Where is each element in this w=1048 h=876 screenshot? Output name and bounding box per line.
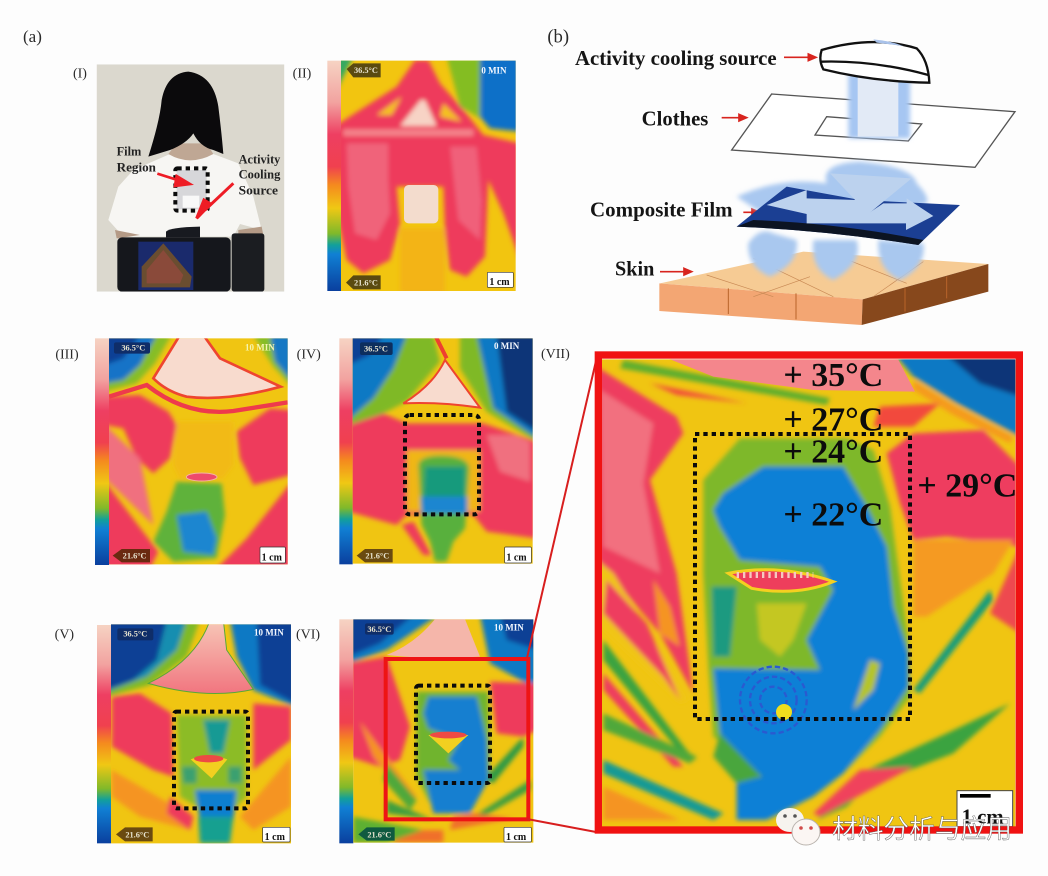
cooling source device: [820, 39, 929, 83]
temperature 22: + 22°C: [783, 496, 883, 533]
film region dotted box: [405, 415, 479, 514]
icon: camera handle: [166, 227, 200, 237]
panel II: thermal image 0 min, uncovered: 36.5°C: [354, 66, 378, 75]
cooling spiral pattern: [740, 667, 807, 733]
panel II: thermal image 0 min, uncovered: 21.6°C: [354, 279, 378, 288]
panel III: thermal image 10 min, cooling source on: [55, 335, 293, 568]
scale bar: [505, 547, 531, 563]
label: composite film: Composite Film: [590, 200, 733, 222]
heading: part a label: (a): [23, 27, 42, 46]
scale bar: [957, 791, 1013, 827]
watermark: WeChat logo: [776, 808, 820, 845]
panel number II: (II): [293, 66, 312, 81]
colour scale bar: [327, 61, 341, 291]
icon: camera screen: [138, 242, 193, 290]
watermark text: 材料分析与应用: [832, 814, 1012, 844]
panel number V: (V): [55, 628, 74, 643]
time label: 10 MIN: [245, 343, 275, 353]
film region dotted box: [695, 434, 910, 719]
left hot region: [597, 367, 693, 693]
arrow: clothes: [722, 114, 747, 121]
panel number I: (I): [73, 66, 87, 81]
panel VI: thermal image 10 min with zoom box: 21.6°C: [367, 830, 391, 839]
right hot region: [887, 430, 1020, 547]
icon: shirt: [108, 154, 262, 237]
time label: 0 MIN: [481, 65, 507, 75]
time label: 10 MIN: [494, 623, 524, 633]
icon: thermal camera: [117, 237, 231, 292]
temperature tags: [117, 628, 153, 640]
red frame: [598, 355, 1019, 830]
panel V: thermal image 10 min, film on: [55, 620, 295, 847]
zoom region red box: [386, 659, 528, 819]
panel II: thermal image 0 min, uncovered: 1 cm: [489, 277, 510, 288]
green film zone: [703, 438, 910, 777]
panel VI: thermal image 10 min with zoom box: 36.5°C: [367, 625, 391, 634]
film patch in thermal image: [404, 185, 438, 223]
panel III: thermal image 10 min, cooling source on: 36.5°C: [121, 344, 145, 353]
panel IV: thermal image 0 min, film on: 1 cm: [506, 552, 527, 563]
label: cooling source: Activity cooling source: [575, 48, 777, 70]
colour scale bar: [97, 625, 111, 843]
panel I: photo of subject with film and camera: [73, 64, 284, 292]
annotation: activity cooling source: Activity: [239, 152, 281, 166]
film hourglass: [191, 755, 227, 778]
diagonal green strips: [913, 590, 993, 693]
arrow: to film region: [157, 174, 190, 186]
zoom connector lines: [527, 361, 596, 832]
icon: arm skin: [115, 227, 263, 238]
heading: part b label: (b): [547, 27, 569, 48]
cold air cloud: [737, 162, 927, 223]
colour scale bar: [95, 338, 109, 565]
temperature tags: [347, 63, 381, 77]
film region dotted box: [175, 168, 208, 211]
panel IV: thermal image 0 min, film on: 36.5°C: [364, 344, 388, 353]
film hourglass: [428, 735, 468, 753]
panel III: thermal image 10 min, cooling source on: 21.6°C: [123, 552, 147, 561]
yellow hot point: [776, 704, 792, 720]
icon: hair: [148, 72, 223, 157]
time label: 0 MIN: [494, 341, 520, 351]
clothes sheet: [732, 73, 1015, 167]
top band: [620, 360, 830, 405]
arrow: to cooling source: [197, 183, 233, 218]
panel V: thermal image 10 min, film on: 1 cm: [265, 832, 286, 843]
arrow: cooling source: [784, 54, 816, 61]
neck patch: [403, 360, 480, 408]
panel number VI: (VI): [296, 628, 320, 643]
panel VII: enlarged thermal image with temperatures: [597, 355, 1020, 832]
temperature 24: + 24°C: [783, 433, 883, 470]
icon: neck: [168, 143, 213, 160]
panel IV: thermal image 0 min, film on: [297, 335, 537, 568]
panel b: layered cooling diagram: [547, 27, 1015, 325]
temperature 35: + 35°C: [783, 357, 883, 394]
time label: 10 MIN: [254, 628, 284, 638]
neck patch: [153, 335, 281, 398]
temperature tags: [365, 623, 394, 635]
composite film: [737, 173, 960, 245]
panel V: thermal image 10 min, film on: 21.6°C: [125, 830, 149, 839]
panel VII: enlarged thermal image with temperatures: 1 cm: [962, 806, 1004, 828]
icon: film patch: [177, 170, 207, 209]
skin block: [659, 252, 988, 325]
neck hot region: [663, 357, 915, 392]
blue cold zone: [713, 467, 908, 820]
temperature 29: + 29°C: [917, 468, 1017, 505]
colour scale bar: [339, 619, 353, 843]
panel IV: thermal image 0 min, film on: 21.6°C: [365, 552, 389, 561]
panel VI: thermal image 10 min with zoom box: [296, 615, 538, 847]
scale bar: [263, 827, 290, 842]
colour scale bar: [339, 338, 353, 564]
panel I: photo of subject with film and camera: Source: [239, 184, 279, 198]
scale bar: [487, 272, 513, 287]
film region dotted box: [174, 712, 248, 808]
panel number VII: (VII): [541, 347, 570, 362]
film region dotted box: [416, 686, 490, 783]
panel II: thermal image 0 min, uncovered: [293, 57, 520, 297]
label: skin: Skin: [615, 259, 655, 281]
temperature 27: + 27°C: [783, 402, 883, 439]
scale bar: [260, 547, 285, 563]
film hot spot: [186, 473, 217, 481]
red arc under neck: [109, 385, 288, 412]
panel VI: thermal image 10 min with zoom box: 1 cm: [506, 832, 527, 843]
arrow: composite film: [743, 209, 760, 216]
panel I: photo of subject with film and camera: Cooling: [239, 168, 281, 182]
panel number III: (III): [55, 347, 79, 362]
neck patch: [148, 620, 253, 693]
neck patch: [386, 619, 480, 657]
panel I: photo of subject with film and camera: Region: [117, 161, 156, 175]
top right cold region: [895, 355, 1020, 437]
stripes lower left: [603, 640, 697, 760]
film hot slit: [728, 570, 833, 591]
annotation: film region: Film: [117, 145, 142, 159]
panel number IV: (IV): [297, 347, 321, 362]
cold air flowing to skin: [748, 231, 924, 280]
scale bar: [504, 827, 531, 842]
label: clothes: Clothes: [642, 109, 708, 131]
temperature tags: [360, 342, 393, 355]
panel V: thermal image 10 min, film on: 36.5°C: [123, 630, 147, 639]
panel III: thermal image 10 min, cooling source on: 1 cm: [262, 552, 283, 563]
temperature tags: [114, 342, 150, 354]
arrow: skin: [660, 268, 692, 275]
neck line: [435, 335, 447, 358]
